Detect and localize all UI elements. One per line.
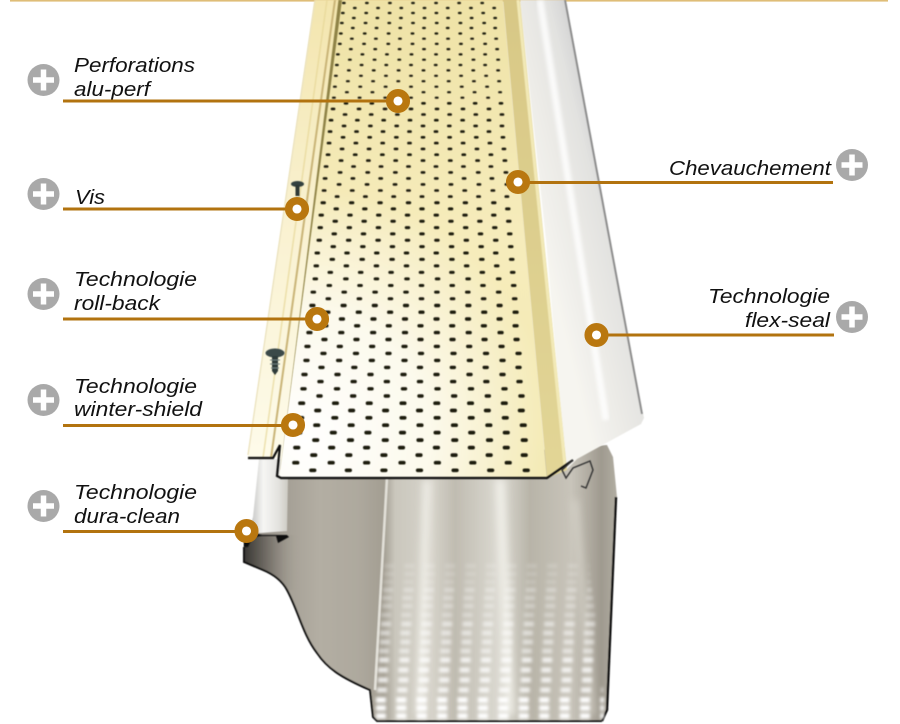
marker — [289, 201, 305, 217]
leader line — [63, 208, 297, 210]
label — [74, 481, 197, 528]
icon: plus — [28, 278, 60, 310]
panel surface — [279, 0, 547, 478]
label: Technologie — [74, 375, 197, 398]
leader line — [63, 530, 247, 533]
label: flex-seal — [745, 309, 832, 332]
icon: plus — [836, 149, 868, 181]
label: Vis — [75, 186, 105, 209]
back wall light highlights — [420, 480, 592, 715]
callout: Technologie roll-back — [28, 268, 325, 327]
label: dura-clean — [74, 505, 180, 528]
leader line — [63, 318, 317, 320]
flex-seal white strip — [520, 0, 644, 470]
leader line — [63, 100, 398, 102]
label: Chevauchement — [669, 157, 832, 180]
icon: plus — [28, 384, 60, 416]
callout: Technologie flex-seal — [588, 285, 868, 343]
callout: Technologie dura-clean — [28, 481, 255, 539]
label: roll-back — [74, 292, 162, 315]
gutter illustration — [244, 0, 644, 721]
icon: plus — [836, 301, 868, 333]
icon: plus — [28, 64, 60, 96]
marker — [238, 523, 255, 539]
label: Technologie — [74, 481, 197, 504]
gutter body — [244, 445, 617, 721]
screw: lower — [266, 348, 284, 375]
marker — [285, 417, 301, 433]
callout: Chevauchement — [510, 149, 868, 190]
label: Technologie — [708, 285, 830, 308]
label: Perforations — [74, 54, 195, 77]
dura-clean white strip — [244, 459, 289, 547]
leader line — [63, 424, 293, 427]
label — [74, 54, 195, 101]
callout: Technologie winter-shield — [28, 375, 301, 433]
icon: plus — [28, 178, 60, 210]
leader line — [596, 334, 834, 336]
top rule — [10, 0, 888, 2]
label: alu-perf — [74, 78, 153, 101]
screw: upper — [291, 181, 304, 196]
label — [74, 268, 197, 315]
leader line — [518, 181, 833, 184]
back wall reflected perforations — [376, 566, 604, 716]
marker — [390, 93, 406, 109]
callout: Vis — [28, 178, 305, 217]
icon: plus — [28, 490, 60, 522]
right overlap flange — [503, 0, 567, 478]
label: winter-shield — [74, 398, 203, 421]
label — [708, 285, 832, 332]
callout: Perforations alu-perf — [28, 54, 406, 109]
marker — [309, 311, 325, 327]
label: Technologie — [74, 268, 197, 291]
left flange — [248, 0, 342, 470]
left flange crease lines — [248, 0, 341, 470]
perforated panel — [279, 0, 547, 478]
label — [74, 375, 203, 421]
perforations — [294, 3, 528, 470]
marker — [510, 174, 526, 190]
black cut edges and clip — [248, 445, 593, 488]
marker — [588, 327, 605, 343]
